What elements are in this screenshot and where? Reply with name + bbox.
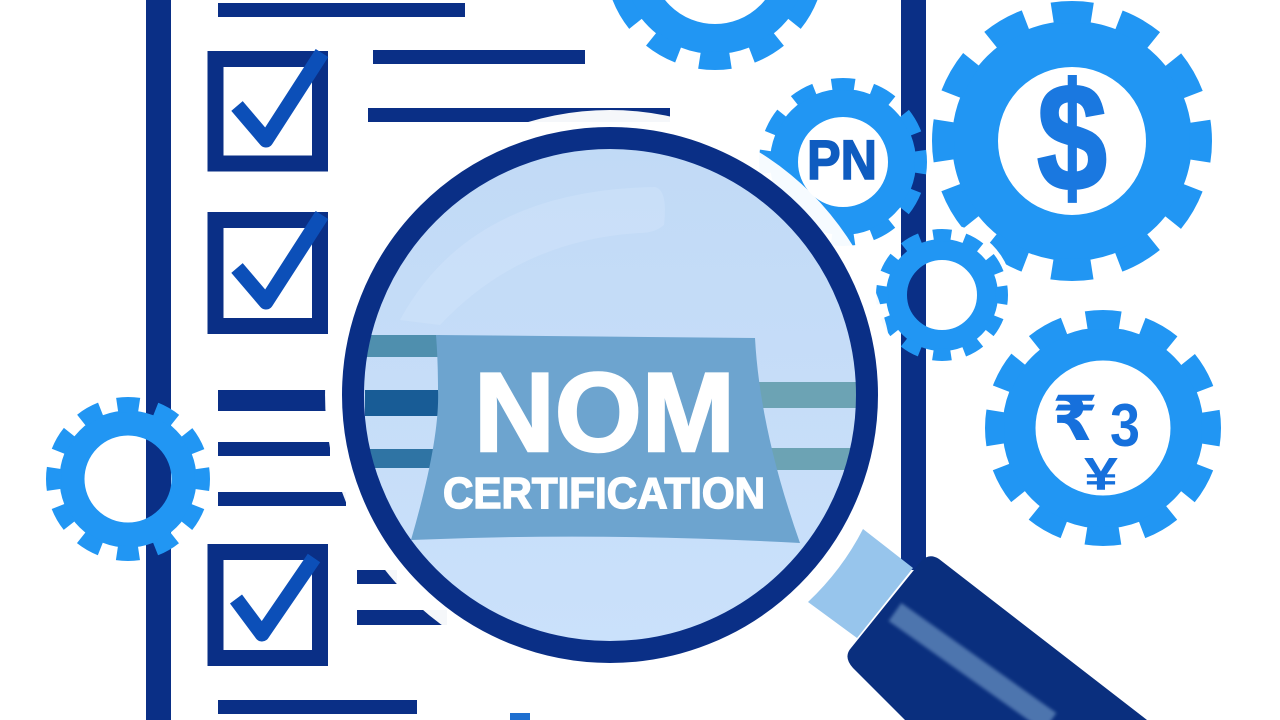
lens [360, 145, 860, 645]
text lines: bottom group [218, 570, 447, 714]
gear: left [54, 404, 202, 554]
gear: PN [765, 84, 921, 240]
lens halo [325, 110, 895, 680]
text lines: top group [218, 3, 670, 122]
NOM banner [411, 335, 800, 543]
gear: dollar [943, 12, 1201, 270]
magnifier [325, 110, 1147, 720]
white outline behind small gear [871, 224, 1013, 366]
document panel [146, 0, 926, 720]
text lines: middle group [218, 390, 346, 506]
banner heading: NOM: NOM [474, 350, 735, 475]
gear label: dollar sign: $ [1037, 51, 1107, 223]
banner subheading: CERTIFICATION: CERTIFICATION [443, 469, 765, 518]
checkbox 3 [216, 552, 320, 658]
small blue mark at bottom [510, 713, 530, 720]
gear label: PN: PN [807, 128, 877, 191]
magnified stripes [365, 335, 860, 470]
gear label: yen: ¥ [1084, 448, 1119, 500]
handle connector [808, 529, 913, 638]
handle [847, 556, 1147, 720]
lens glare [400, 187, 665, 325]
gear: top [614, 0, 816, 61]
gear label: three: 3 [1110, 392, 1140, 459]
gear label: rupee: ₹ [1052, 382, 1098, 455]
gear: currencies [994, 320, 1212, 536]
gear: small ring [882, 235, 1002, 355]
checkbox 1 [216, 53, 322, 164]
checkbox 2 [216, 215, 322, 326]
lens ring [353, 138, 867, 652]
handle highlight [895, 612, 1050, 720]
